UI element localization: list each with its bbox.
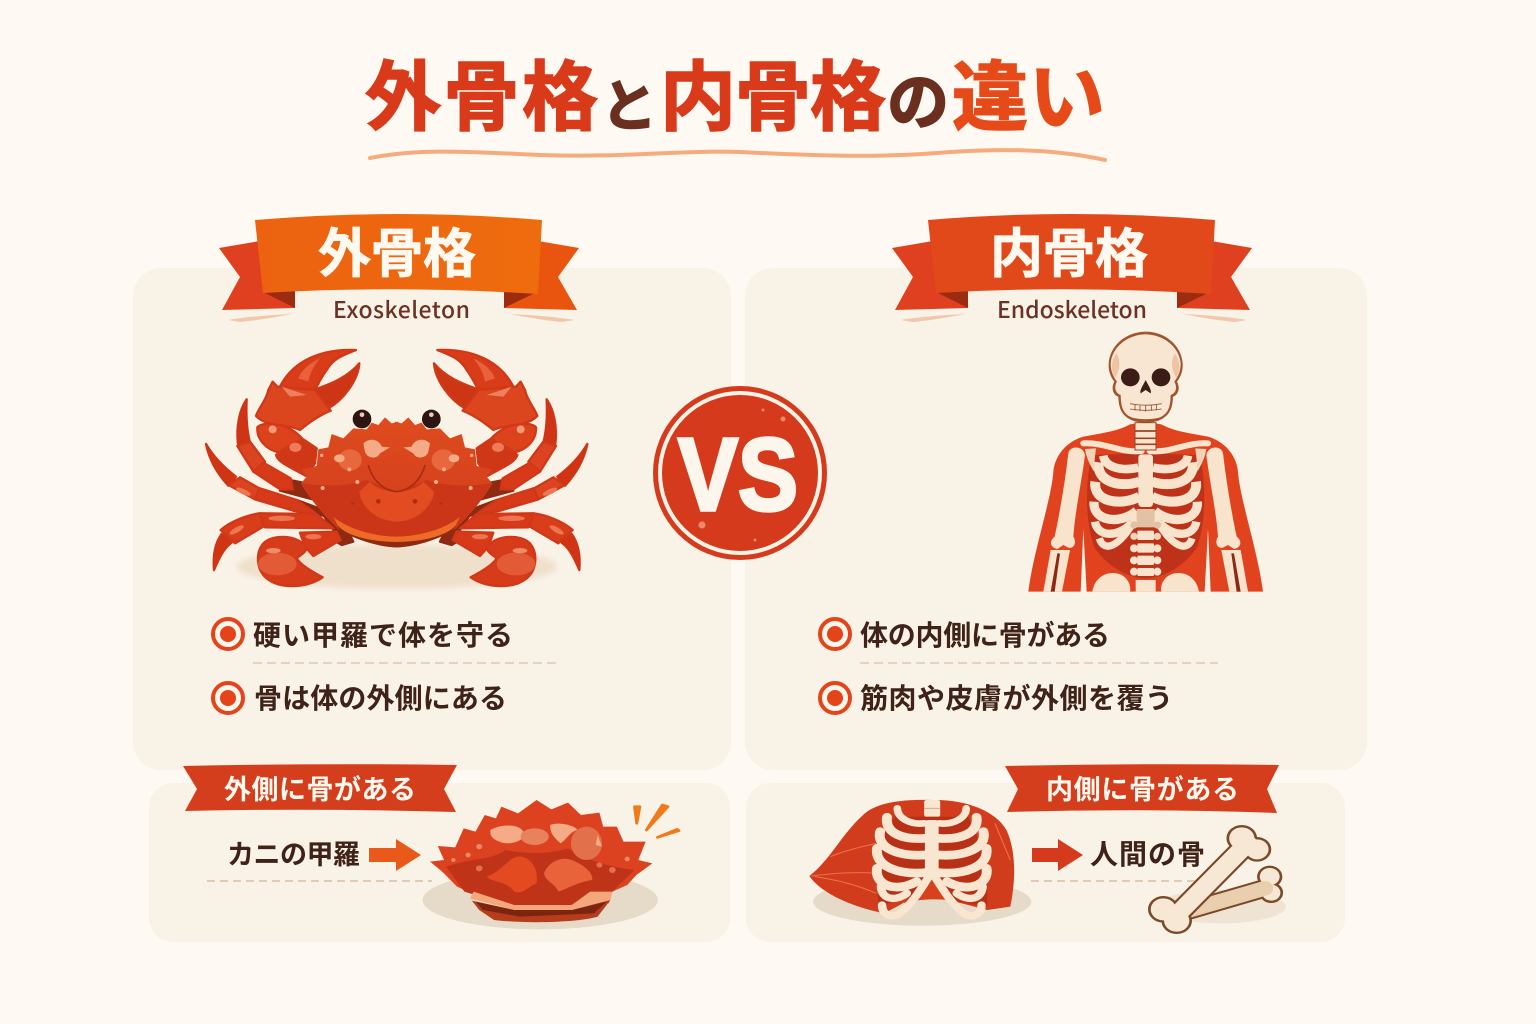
nose: [1140, 380, 1151, 393]
right bullets: [820, 619, 1218, 714]
bullet text 1: 硬い甲羅で体を守る: [253, 620, 513, 651]
teeth: [1130, 404, 1162, 412]
bullet text 3: 体の内側に骨がある: [860, 619, 1110, 651]
ribs left: [877, 808, 930, 916]
panel: exoskeleton: [133, 268, 731, 770]
icon: bullet 1: [213, 619, 243, 649]
skeleton left half: [1028, 332, 1146, 592]
ribbon: outer bones: 外側に骨がある: [224, 774, 416, 805]
subtitle: Endoskeleton: Endoskeleton: [997, 291, 1147, 325]
neck vertebrae: [1135, 423, 1156, 450]
ribs right: [934, 808, 987, 916]
ribbon: exoskeleton: 外骨格: [318, 225, 476, 284]
arrow: to crab shell: [369, 839, 421, 871]
panel: crab shell example: [149, 783, 730, 942]
ribbon: outer bones: [183, 764, 457, 812]
ribbon: inner bones: 内側に骨がある: [1046, 774, 1239, 805]
back bone: [1190, 866, 1283, 910]
label: human bone: 人間の骨: [1090, 839, 1205, 870]
VS badge: VS: [678, 417, 798, 532]
ribbon: endoskeleton: [892, 214, 1252, 322]
arrow: from rib cage: [1032, 839, 1083, 871]
ribbon: endoskeleton: 内骨格: [990, 225, 1148, 284]
crab left half body: [301, 417, 398, 547]
panel: endoskeleton: [745, 268, 1367, 770]
skull temple shading: [1112, 353, 1179, 378]
title: 内骨格: [660, 56, 886, 141]
lower spine: [1136, 509, 1156, 592]
VS badge: [653, 386, 827, 560]
label: crab shell: カニの甲羅: [227, 840, 360, 870]
crab right half limbs: [422, 350, 587, 586]
eye sockets: [1121, 368, 1170, 386]
title: 違い: [952, 56, 1105, 141]
illustration: skeleton: [1028, 332, 1263, 592]
ribbon: exoskeleton: [219, 214, 579, 322]
crab right half body: [395, 417, 492, 547]
illustration: crab: [206, 350, 587, 589]
title: の: [887, 69, 949, 138]
panel: human bone example: [746, 783, 1345, 942]
title: [365, 56, 1105, 141]
illustration: bones: [1148, 825, 1286, 934]
title: と: [601, 75, 657, 138]
illustration: rib cage with muscle: [809, 800, 1031, 926]
illustration: crab shell: [423, 800, 679, 929]
subtitle: Exoskeleton: Exoskeleton: [333, 291, 470, 325]
front bone: [1148, 825, 1271, 934]
sparkle lines: [635, 805, 679, 837]
icon: bullet 4: [820, 683, 850, 713]
bullet text 4: 筋肉や皮膚が外側を覆う: [860, 682, 1173, 714]
skull face: [1111, 334, 1181, 419]
icon: bullet 3: [820, 619, 850, 649]
left bullets: [213, 619, 560, 714]
ribbon: inner bones: [1005, 764, 1279, 813]
icon: bullet 2: [213, 683, 243, 713]
title: 外骨格: [365, 56, 598, 141]
bullet text 2: 骨は体の外側にある: [254, 683, 507, 714]
sternum: [1138, 454, 1153, 507]
title underline: [370, 150, 1105, 160]
sternum and neck: [924, 800, 940, 875]
skeleton right half: [1145, 332, 1263, 592]
crab left half limbs: [206, 350, 371, 586]
